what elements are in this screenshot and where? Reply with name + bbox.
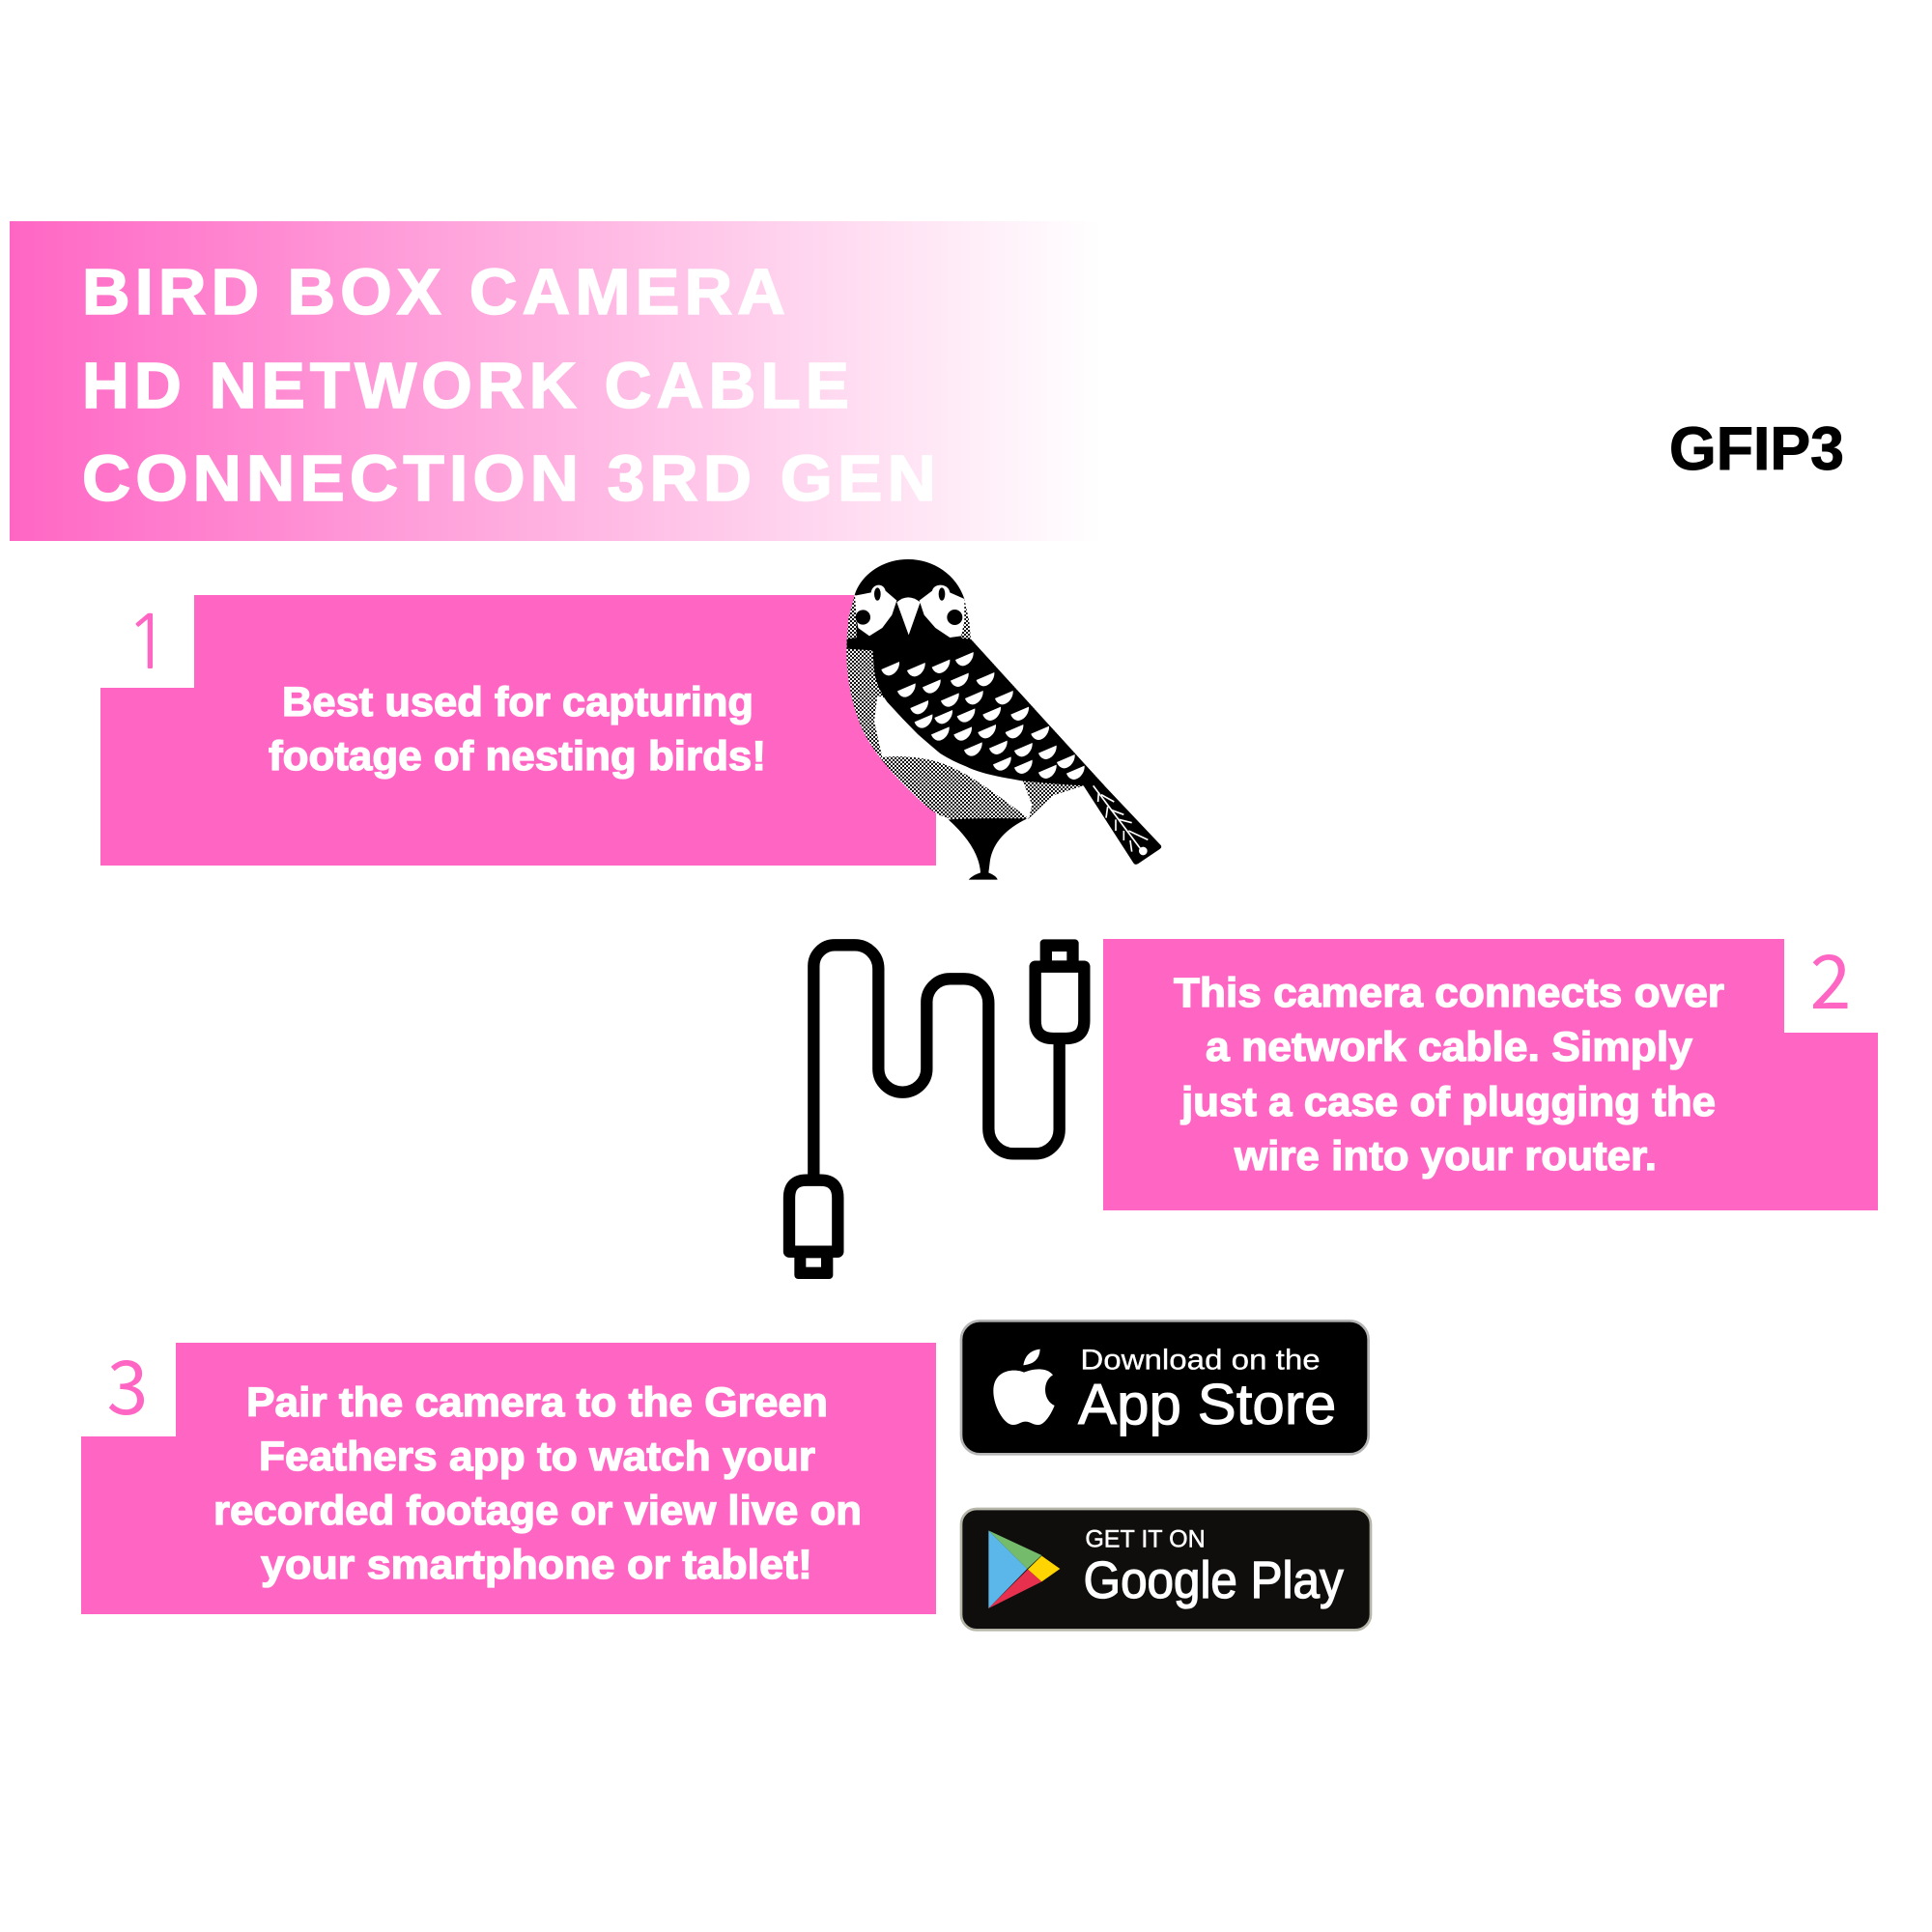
panel: step 1: 1 — [126, 606, 170, 680]
panel: step 2 — [1103, 923, 1878, 1210]
panel: step 3: your smartphone or tablet! — [261, 1542, 812, 1588]
panel: step 3: 3 — [107, 1329, 148, 1436]
title banner: HD NETWORK CABLE — [82, 350, 854, 422]
title banner: CONNECTION 3RD GEN — [82, 442, 941, 515]
badge: App Store — [961, 1321, 1369, 1454]
panel: step 1 — [100, 595, 936, 866]
badge: Google Play: Google Play — [1084, 1552, 1344, 1609]
panel: step 2: This camera connects over — [1174, 970, 1724, 1016]
panel: step 3 — [81, 1329, 936, 1614]
title banner — [10, 221, 1101, 541]
panel: step 1: Best used for capturing — [282, 679, 753, 725]
illustration: bird — [846, 559, 1161, 880]
panel: step 3: Pair the camera to the Green — [246, 1379, 828, 1426]
panel: step 2: 2 — [1810, 923, 1851, 1031]
panel: step 3: recorded footage or view live on — [213, 1488, 862, 1534]
panel: step 3: Feathers app to watch your — [259, 1434, 815, 1480]
panel: step 2: a network cable. Simply — [1206, 1024, 1692, 1070]
panel: step 2: just a case of plugging the — [1180, 1079, 1716, 1125]
title banner: BIRD BOX CAMERA — [82, 256, 790, 328]
icon: network cable — [789, 939, 1084, 1279]
badge: Google Play: GET IT ON — [1085, 1526, 1206, 1553]
product code: GFIP3 — [1669, 415, 1844, 483]
panel: step 2: wire into your router. — [1234, 1133, 1657, 1179]
badge: Google Play — [961, 1509, 1371, 1630]
badge: App Store: Download on the — [1080, 1345, 1321, 1377]
panel: step 1: footage of nesting birds! — [269, 733, 766, 780]
badge: App Store: App Store — [1078, 1372, 1336, 1436]
